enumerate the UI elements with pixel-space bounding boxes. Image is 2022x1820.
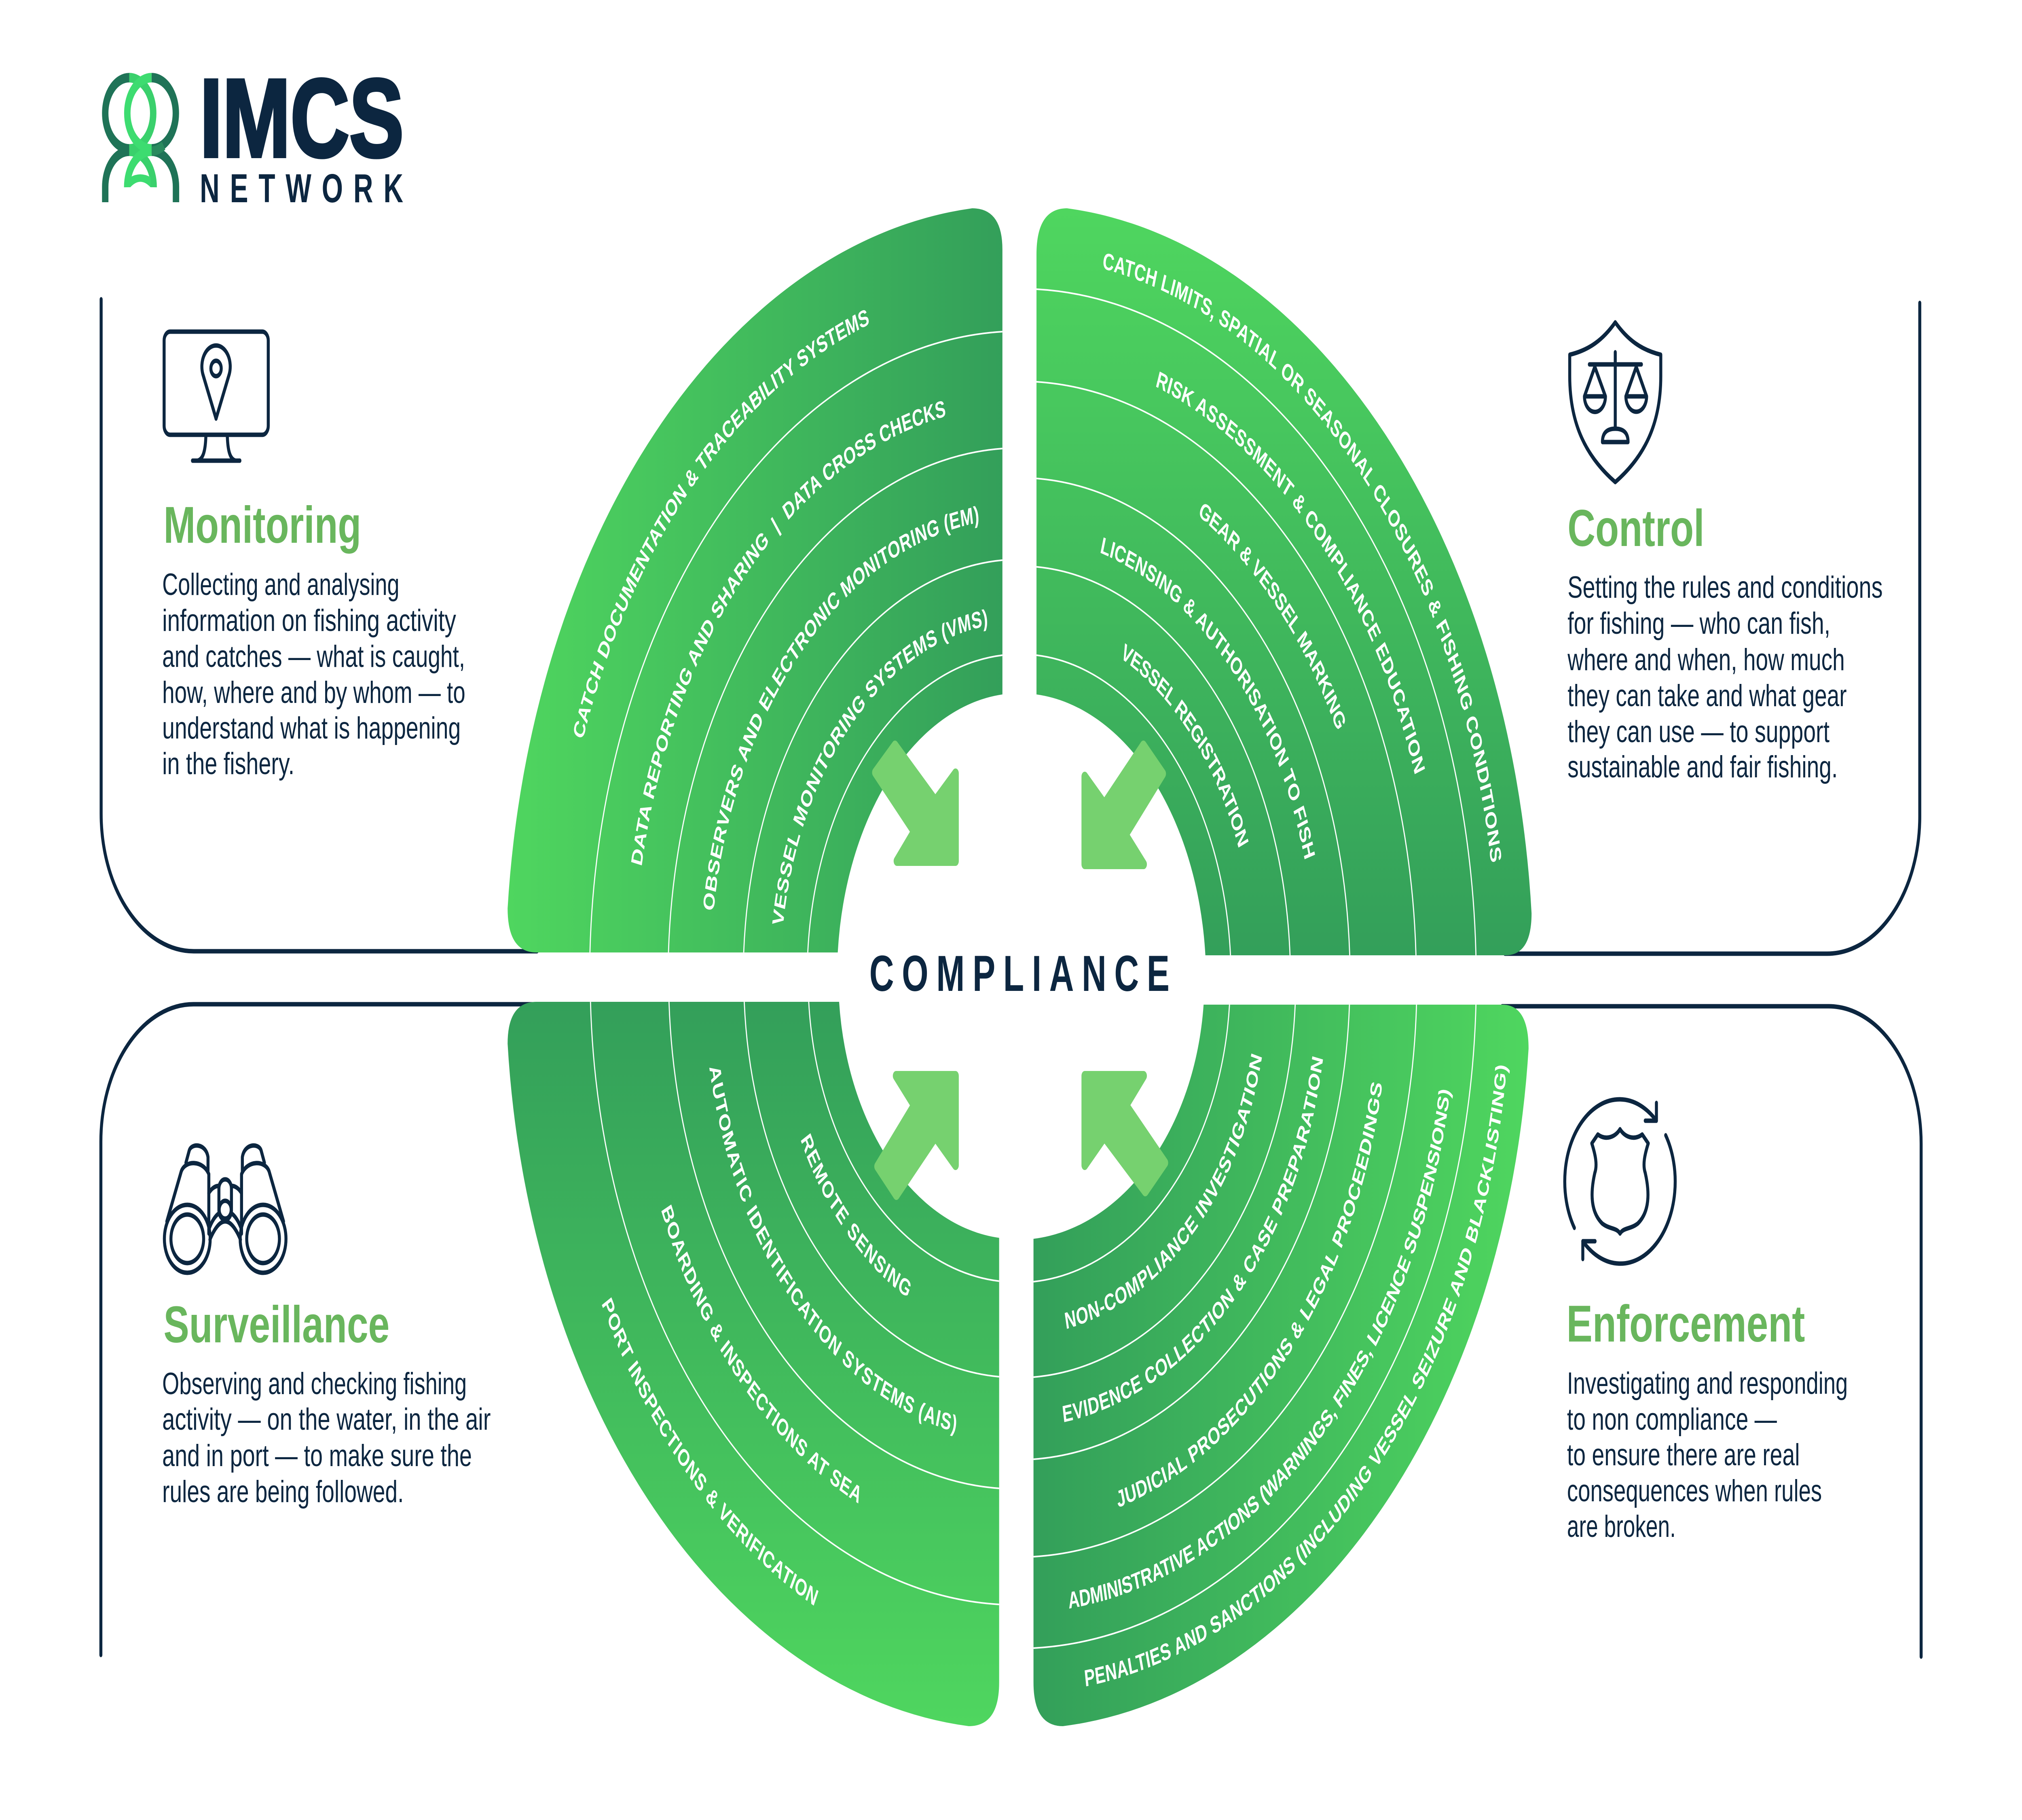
ring label: observers and EM: OBSERVERS AND ELECTRONIC MONITORING (EM) [700, 502, 980, 912]
arrow: top-left pointing to centre [876, 745, 956, 861]
icon: monitor with location pin [164, 332, 268, 461]
ring label: evidence collection: EVIDENCE COLLECTION & CASE PREPARATION [1061, 1054, 1327, 1428]
panel frame: surveillance [101, 1004, 537, 1655]
sector shape: surveillance [508, 1002, 999, 1726]
text block: surveillance: activity — on the water, in the air [162, 1402, 491, 1436]
arrow: bottom-right pointing to centre [1085, 1076, 1165, 1191]
text block: control: they can use — to support [1567, 714, 1830, 749]
sector shape: control [1036, 208, 1531, 955]
text block: enforcement [1567, 1366, 1848, 1543]
arrow: top-right pointing to centre [1085, 745, 1163, 864]
ring dividers: surveillance [590, 1002, 999, 1604]
icon: badge with cycle arrows [1565, 1099, 1675, 1263]
quadrant: surveillance activities [508, 1002, 999, 1726]
logo: IMCS Network [105, 56, 404, 211]
ring dividers: control [1036, 289, 1476, 955]
text block: enforcement: to non compliance — [1567, 1402, 1777, 1436]
text block: surveillance: and in port — to make sure the [162, 1438, 472, 1473]
text block: surveillance: Observing and checking fishing [162, 1366, 467, 1401]
panel frame: control [1505, 303, 1920, 954]
text block: control: they can take and what gear [1567, 678, 1847, 713]
text block: control: sustainable and fair fishing. [1567, 749, 1838, 784]
arrow: bottom-left pointing to centre [878, 1076, 956, 1195]
text block: monitoring: understand what is happening [162, 711, 461, 745]
ring label: licensing: LICENSING & AUTHORISATION TO FISH [1098, 532, 1318, 862]
sector shape: enforcement [1034, 1005, 1529, 1726]
quadrant: enforcement activities [1034, 1005, 1529, 1726]
text block: enforcement: are broken. [1567, 1509, 1676, 1543]
text block: enforcement: Investigating and responding [1567, 1366, 1848, 1400]
quadrant: monitoring activities [508, 208, 1003, 952]
text block: control: for fishing — who can fish, [1567, 606, 1830, 640]
ring label: non-compliance investigation: NON-COMPLIANCE INVESTIGATION [1063, 1051, 1266, 1334]
text block: surveillance: rules are being followed. [162, 1474, 404, 1509]
ring dividers: enforcement [1034, 1005, 1476, 1648]
ring label: vessel registration: VESSEL REGISTRATION [1119, 639, 1252, 851]
panel: control [1505, 303, 1920, 954]
logo wordmark: IMCS: IMCS [200, 56, 404, 180]
ring label: VMS: VESSEL MONITORING SYSTEMS (VMS) [769, 605, 989, 927]
text block: surveillance [162, 1366, 491, 1509]
icon: shield with scales [1570, 322, 1661, 482]
text block: control: where and when, how much [1567, 642, 1845, 677]
text block: enforcement: to ensure there are real [1567, 1437, 1800, 1472]
text block: monitoring: and catches — what is caught, [162, 639, 465, 673]
icon: logo rings [105, 78, 176, 202]
panel: monitoring [101, 299, 537, 951]
ring dividers: monitoring [590, 332, 1003, 952]
ring label: judicial prosecutions: JUDICIAL PROSECUTIONS & LEGAL PROCEEDINGS [1114, 1079, 1386, 1513]
ring label: AIS: AUTOMATIC IDENTIFICATION SYSTEMS (AIS) [706, 1063, 958, 1437]
heading: enforcement: Enforcement [1567, 1295, 1805, 1353]
text block: enforcement: consequences when rules [1567, 1473, 1822, 1508]
panel: surveillance [101, 1004, 537, 1655]
quadrant: control activities [1036, 208, 1531, 955]
text block: monitoring: Collecting and analysing [162, 567, 400, 601]
ring label: boarding: BOARDING & INSPECTIONS AT SEA [658, 1201, 865, 1509]
ring label: catch limits: CATCH LIMITS, SPATIAL OR SEASONAL CLOSURES & FISHING CONDITIONS [1101, 248, 1505, 864]
ring label: catch documentation: CATCH DOCUMENTATION & TRACEABILITY SYSTEMS [569, 304, 871, 742]
logo wordmark: NETWORK: NETWORK [200, 166, 403, 211]
icon: binoculars [164, 1145, 286, 1273]
ring label: data reporting: DATA REPORTING AND SHARING | DATA CROSS CHECKS [628, 396, 947, 868]
text block: monitoring: information on fishing activity [162, 603, 456, 637]
ring label: remote sensing: REMOTE SENSING [797, 1130, 914, 1303]
heading: control: Control [1567, 499, 1705, 557]
ring label: penalties and sanctions: PENALTIES AND SANCTIONS (INCLUDING VESSEL SEIZURE AND BLACKLISTING) [1083, 1063, 1510, 1692]
ring label: gear marking: GEAR & VESSEL MARKING [1196, 497, 1349, 734]
panel frame: monitoring [101, 299, 537, 951]
heading: monitoring: Monitoring [163, 496, 361, 554]
text block: monitoring [162, 567, 465, 781]
ring label: port inspections: PORT INSPECTIONS & VERIFICATION [598, 1294, 821, 1611]
panel: enforcement [1502, 1006, 1921, 1657]
text block: monitoring: in the fishery. [162, 746, 294, 781]
title: compliance: COMPLIANCE [869, 945, 1170, 1002]
ring label: administrative actions: ADMINISTRATIVE ACTIONS (WARNINGS, FINES, LICENCE SUSPENSIONS) [1067, 1086, 1454, 1614]
text block: monitoring: how, where and by whom — to [162, 675, 465, 709]
panel frame: enforcement [1502, 1006, 1921, 1657]
text block: control [1567, 570, 1883, 784]
sector shape: monitoring [508, 208, 1003, 952]
text block: control: Setting the rules and conditions [1567, 570, 1883, 604]
heading: surveillance: Surveillance [163, 1296, 389, 1354]
ring label: risk assessment: RISK ASSESSMENT & COMPLIANCE EDUCATION [1154, 366, 1428, 777]
